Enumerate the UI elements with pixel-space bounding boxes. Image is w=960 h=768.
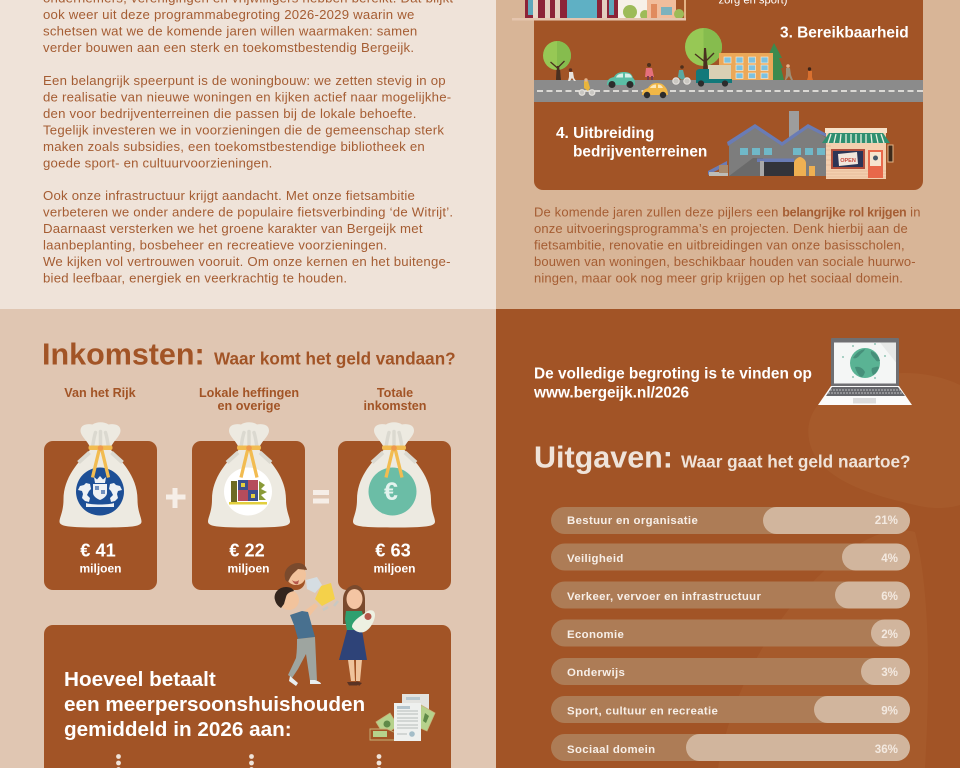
amount: 41 miljoen: [79, 540, 122, 576]
bar: onderwijs: 3%: [881, 666, 898, 679]
callout: full budget link: De volledige begroting is te vinden op: [534, 366, 812, 382]
bar: sociaal domein: [551, 734, 910, 761]
panel: pillars background: [496, 0, 960, 309]
amount: 22 miljoen: € 22: [229, 540, 265, 560]
bar: verkeer, vervoer en infrastructuur: Verkeer, vervoer en infrastructuur: [567, 591, 761, 603]
bar chart: expenses: [551, 507, 910, 761]
card: totaal: [338, 441, 451, 590]
heading: uitbreiding bedrijventerreinen: bedrijventerreinen: [573, 144, 707, 160]
illustration: tree left: [543, 41, 571, 81]
label: lokale heffingen: en overige: [218, 399, 280, 413]
text block: pillars explanation: ningen, maar ook nog meer grip krijgen op het sociaal domein.: [534, 270, 903, 286]
amount: 63 miljoen: [373, 540, 416, 576]
icon: laptop with globe: [818, 338, 912, 405]
text block: introduction: den voor bedrijventerreinen die passen bij de lokale behoefte.: [43, 106, 417, 121]
bar: veiligheid: 4%: [881, 552, 898, 565]
heading: inkomsten: Inkomsten:: [42, 338, 205, 372]
icon: equals: [313, 490, 329, 504]
text block: introduction: Ook onze infrastructuur krijgt aandacht. Met onze fietsambitie: [43, 188, 415, 203]
heading: bereikbaarheid: 3. Bereikbaarheid: [780, 24, 909, 42]
text block: introduction: Daarnaast versterken we het groene karakter van Bergeijk met: [43, 221, 423, 236]
illustration: tree right: [685, 28, 722, 72]
icon: money bag totaal: [353, 422, 435, 528]
amount: 22 miljoen: [227, 540, 270, 576]
text block: introduction: goede sport- en cultuurvoorzieningen.: [43, 156, 273, 170]
amount: 63 miljoen: miljoen: [373, 562, 416, 576]
card: rijk: [44, 441, 157, 590]
text block: introduction: de realisatie van nieuwe woningen en kijken actief naar mogelijkhe-: [43, 90, 451, 104]
bar: veiligheid: [551, 544, 910, 570]
icon: dotted leaders: [116, 754, 381, 768]
bar: veiligheid: Veiligheid: [567, 553, 624, 565]
label: lokale heffingen: Lokale heffingen: [199, 386, 299, 400]
panel: expenses background: [496, 309, 960, 768]
amount: 22 miljoen: miljoen: [227, 562, 270, 576]
callout: full budget link: www.bergeijk.nl/2026: [533, 384, 689, 402]
heading: household question: een meerpersoonshuishouden: [64, 693, 365, 716]
text block: introduction: [43, 0, 453, 286]
text block: pillars explanation: [534, 204, 921, 286]
illustration: shop: OPEN: [840, 158, 856, 164]
illustration: pine tree: [765, 43, 784, 80]
text block: pillars explanation: fietsambitie, renovatie en uitbreidingen van onze basisscholen,: [534, 238, 905, 252]
text block: introduction: verder bouwen aan een sterk en toekomstbestendig Bergeijk.: [43, 40, 414, 55]
bar: sport, cultuur en recreatie: 9%: [881, 704, 898, 718]
text block: pillars explanation: De komende jaren zullen deze pijlers een belangrijke rol krijgen in: [534, 204, 921, 220]
label: totale inkomsten: inkomsten: [364, 399, 426, 413]
illustration: yellow car: [642, 83, 668, 98]
icon: documents and money: [370, 694, 435, 741]
text block: pillars explanation: bouwen van woningen, beschikbaar houden van sociale huurwo-: [534, 254, 916, 269]
child: [285, 563, 338, 610]
card: lokale heffingen: [192, 441, 305, 590]
illustration: family: [275, 563, 375, 686]
bar: sociaal domein: 36%: [875, 743, 898, 756]
mother: [339, 585, 375, 686]
icon: plus: [166, 488, 186, 508]
bar: bestuur en organisatie: Bestuur en organisatie: [567, 515, 698, 527]
icon: money bag totaal: €: [384, 478, 398, 506]
bar: sociaal domein: Sociaal domein: [567, 744, 655, 756]
label: van het rijk: Van het Rijk: [64, 386, 137, 400]
bar: onderwijs: [551, 658, 910, 685]
amount: 41 miljoen: miljoen: [79, 562, 122, 576]
amount: 63 miljoen: € 63: [375, 540, 411, 560]
bar: economie: [551, 620, 910, 646]
illustration: cyclists and pedestrians: [568, 63, 813, 95]
bar: economie: Economie: [567, 629, 624, 641]
label: totale inkomsten: Totale: [377, 386, 413, 400]
bar: sport, cultuur en recreatie: [551, 696, 910, 723]
heading: uitbreiding bedrijventerreinen: 4. Uitbreiding: [556, 125, 654, 142]
panel: pillars card: [534, 0, 923, 190]
panel: household costs: [44, 625, 451, 768]
bar: verkeer, vervoer en infrastructuur: 6%: [881, 590, 898, 603]
text block: pillars explanation: onze uitvoeringsprogramma’s en projecten. Denk hierbij aan de: [534, 221, 908, 236]
text block: introduction: We kijken vol vertrouwen vooruit. Om onze kernen en het buitenge-: [43, 254, 451, 269]
text block: introduction: Een belangrijk speerpunt is de woningbouw: we zetten stevig in op: [43, 73, 446, 88]
bar: sport, cultuur en recreatie: Sport, cultuur en recreatie: [567, 706, 718, 718]
heading: household question: [64, 668, 365, 741]
panel: income background: [0, 309, 496, 768]
bar: verkeer, vervoer en infrastructuur: [551, 582, 910, 608]
illustration: truck: [696, 65, 732, 87]
icon: money bag rijk: [60, 422, 142, 528]
panel: introduction background: [0, 0, 496, 309]
text block: introduction: Tegelijk investeren we in voorzieningen die de gemeenschap sterk: [43, 122, 444, 138]
heading: uitgaven: Uitgaven:: [534, 440, 673, 474]
subheading: inkomsten: Waar komt het geld vandaan?: [214, 350, 456, 368]
bar: bestuur en organisatie: [551, 507, 910, 534]
subheading: uitgaven: Waar gaat het geld naartoe?: [681, 452, 911, 472]
illustration: road: [534, 80, 923, 102]
bar: bestuur en organisatie: 21%: [875, 514, 898, 527]
father: [275, 587, 321, 686]
text block: introduction: bied leefbaar, energiek en veerkrachtig te houden.: [43, 270, 347, 286]
icon: money bag bergeijk: [208, 422, 290, 528]
illustration: factory: [708, 111, 828, 176]
text block: introduction: verbeteren we onder andere de populaire fietsverbinding ‘de Witrijt’.: [43, 204, 453, 220]
decorative background blobs: [718, 373, 960, 768]
bar: economie: 2%: [881, 628, 898, 641]
illustration: teal car: [607, 72, 635, 88]
amount: 41 miljoen: € 41: [80, 540, 116, 560]
heading: household question: gemiddeld in 2026 aan:: [64, 718, 292, 741]
text block: introduction: schetsen wat we de komende jaren willen waarmaken: samen: [43, 24, 417, 38]
heading: uitbreiding bedrijventerreinen: [556, 125, 707, 160]
heading: household question: Hoeveel betaalt: [64, 668, 216, 691]
illustration: public buildings: [512, 0, 686, 20]
text block: introduction: maken zoals subsidies, een toekomstbestendige bibliotheek en: [43, 139, 425, 154]
illustration: orange apartment: [719, 53, 773, 80]
bar: onderwijs: Onderwijs: [567, 667, 625, 679]
text block: introduction: ook weer uit deze programmabegroting 2026-2029 waarin we: [43, 7, 415, 22]
text block: introduction: laanbeplanting, bosbeheer en recreatieve voorzieningen.: [43, 238, 387, 252]
illustration: shop: [822, 128, 893, 179]
callout: full budget link: [533, 366, 812, 402]
